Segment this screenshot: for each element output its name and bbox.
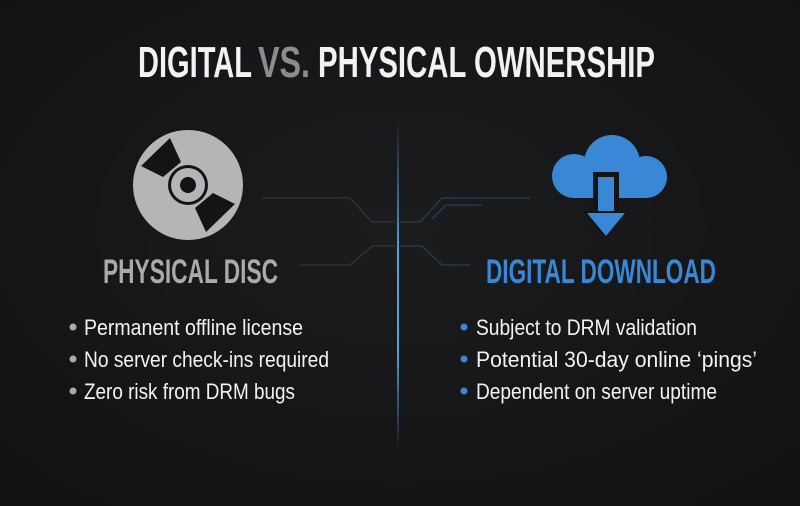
list: physical benefits: Zero risk from DRM bugs bbox=[84, 379, 295, 404]
divider line bbox=[397, 118, 399, 452]
list: digital drawbacks: Potential 30-day online ‘pings’ bbox=[476, 347, 757, 372]
circuit lines bbox=[262, 198, 530, 265]
title: VS. bbox=[258, 38, 310, 87]
list: digital drawbacks: Subject to DRM validation bbox=[476, 315, 697, 340]
icon: disc bbox=[133, 130, 243, 240]
icon: cloud download bbox=[552, 135, 667, 238]
list: physical benefits: Permanent offline license bbox=[84, 315, 303, 340]
label: physical disc: PHYSICAL DISC bbox=[103, 253, 278, 291]
title bbox=[138, 38, 655, 87]
title: DIGITAL bbox=[138, 38, 252, 87]
list: physical benefits: No server check-ins required bbox=[84, 347, 329, 372]
list: digital drawbacks bbox=[460, 315, 757, 404]
list: digital drawbacks: Dependent on server uptime bbox=[476, 379, 717, 404]
list: physical benefits bbox=[70, 315, 329, 404]
